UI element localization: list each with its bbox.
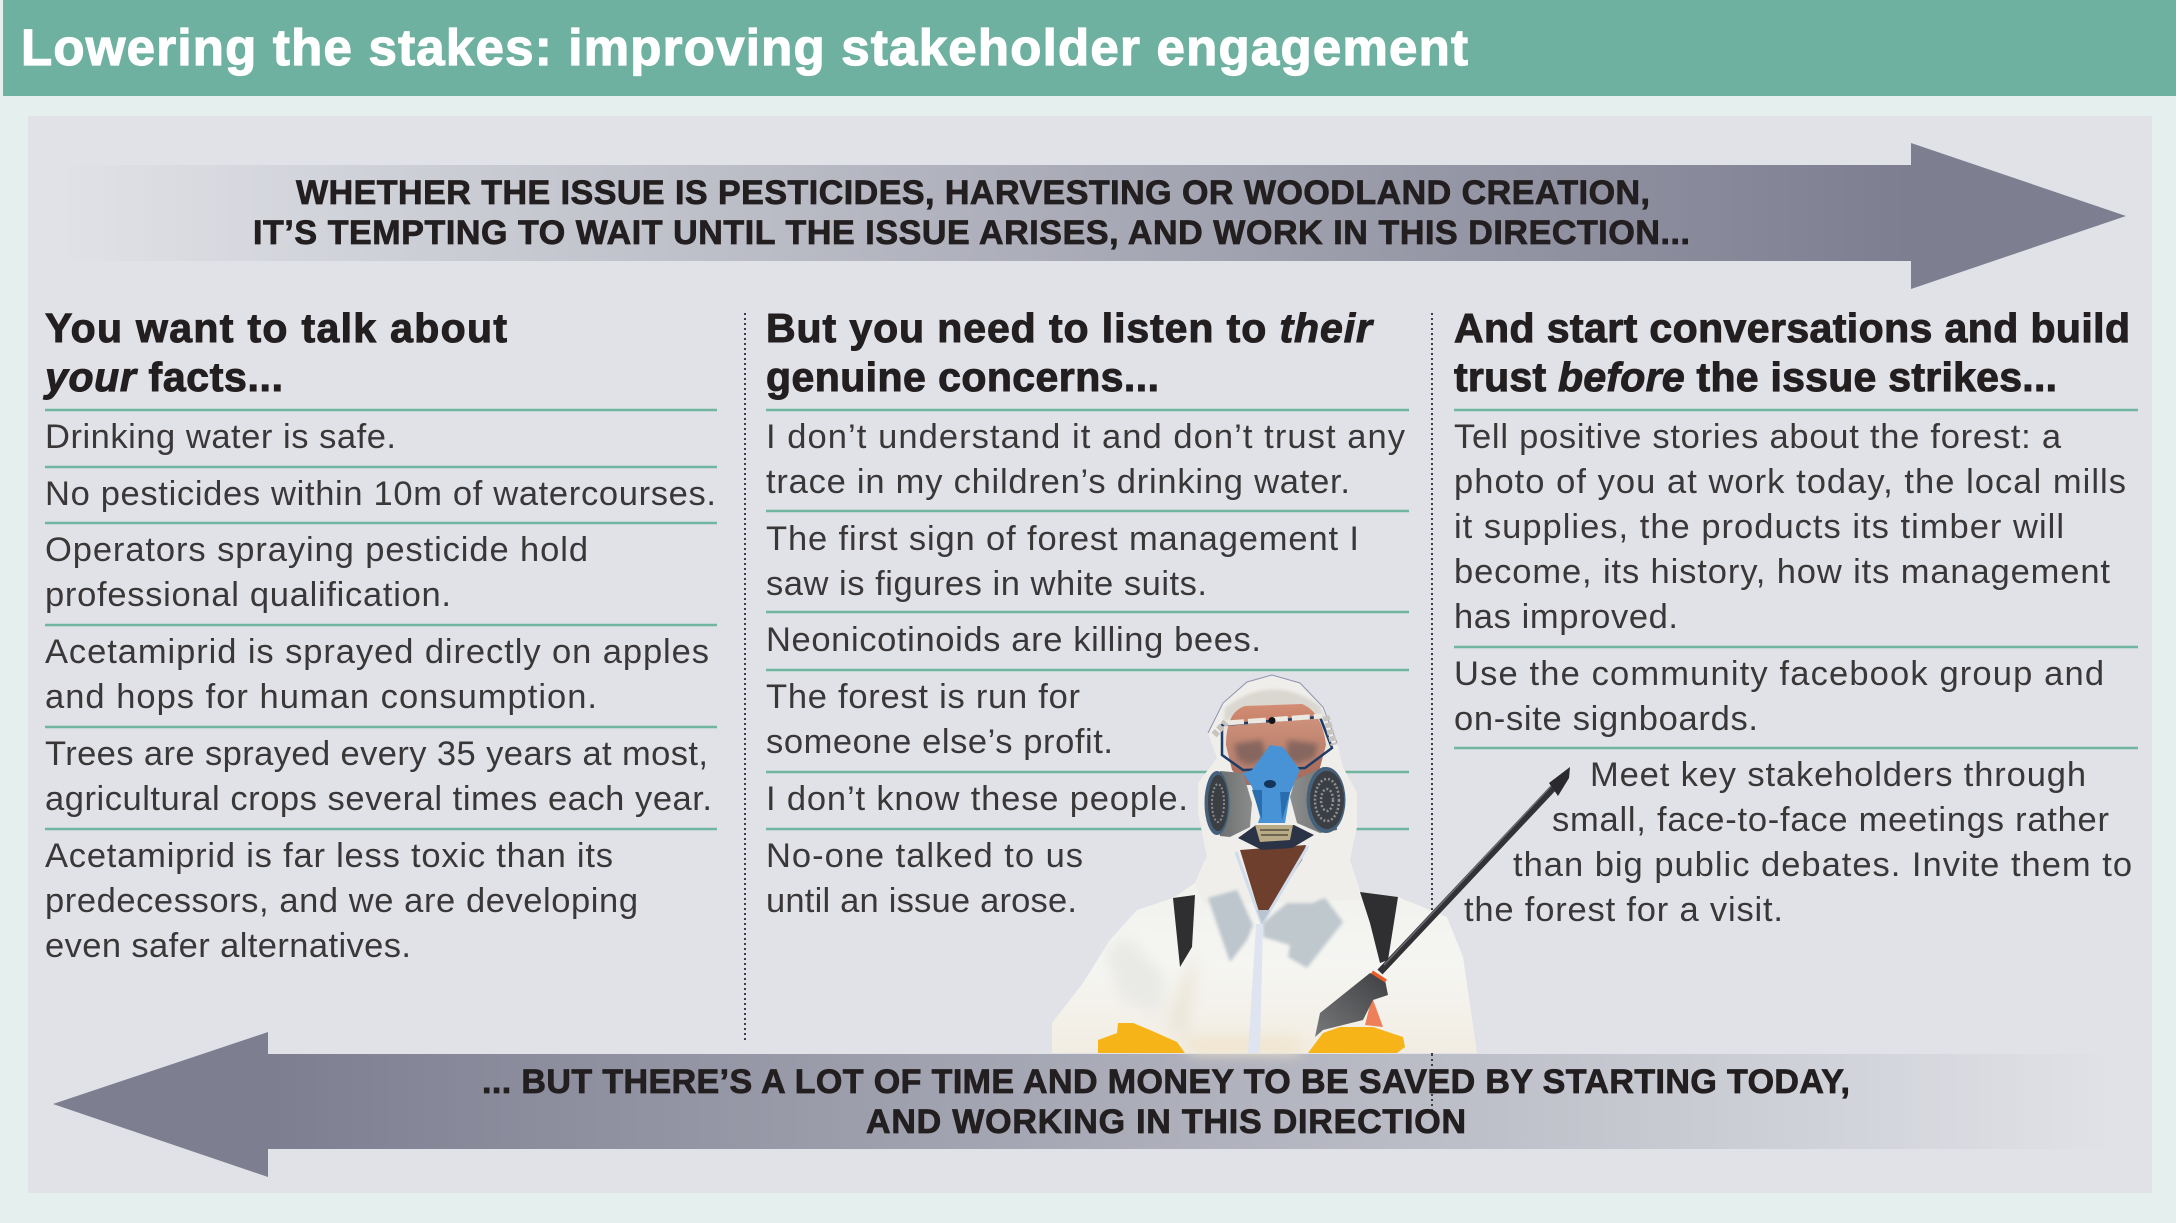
column 2 statements: No-one talked to us: [766, 837, 1083, 875]
column 2 heading: But you need to listen to their: [766, 305, 1374, 351]
column 2 statements: I don’t understand it and don’t trust any: [766, 418, 1406, 456]
column 3 statements: Meet key stakeholders through: [1590, 756, 2086, 794]
column 1 statements: Acetamiprid is far less toxic than its: [45, 837, 613, 875]
column 3 statements: photo of you at work today, the local mills: [1454, 463, 2126, 501]
column 1 statements: and hops for human consumption.: [45, 678, 597, 716]
column 2: their concerns: [766, 305, 1409, 920]
column 1 heading: your facts...: [43, 354, 283, 400]
column 1 statements: predecessors, and we are developing: [45, 882, 638, 920]
column 1: your facts: [43, 305, 717, 965]
column 1 statements: professional qualification.: [45, 576, 451, 614]
column 1 heading: [43, 305, 507, 400]
grey lance handle: [1315, 973, 1388, 1037]
yellow glove right: [1308, 1027, 1405, 1053]
suit soft shading: [1105, 935, 1300, 1053]
hood top outline: [1208, 675, 1337, 743]
column 3 statements: Tell positive stories about the forest: a: [1454, 418, 2062, 456]
column 3 statements: on-site signboards.: [1454, 700, 1758, 738]
T-shirt under suit: [1257, 910, 1270, 923]
spray lance: [1315, 767, 1570, 1037]
right respirator cartridge: [1290, 767, 1346, 833]
collar edges: [1236, 846, 1308, 924]
figure: forestry worker in protective suit and respirator: [1052, 675, 1570, 1053]
column 2 heading: [766, 305, 1374, 400]
column 3 statements: it supplies, the products its timber will: [1454, 508, 2064, 546]
harness strap right: [1360, 892, 1398, 963]
column 3 heading: And start conversations and build: [1454, 305, 2130, 351]
column 1 statements: Trees are sprayed every 35 years at most,: [45, 735, 708, 773]
forehead and face: [1226, 704, 1326, 785]
white protective suit body: [1052, 860, 1477, 1053]
column dividers: [745, 313, 1432, 1110]
column 2 statements: The first sign of forest management I: [766, 520, 1359, 558]
column 1 statements: even safer alternatives.: [45, 927, 411, 965]
column 1 statements: agricultural crops several times each year.: [45, 780, 712, 818]
hood shading: [1224, 689, 1325, 722]
lower mask straps and beard: [1238, 825, 1314, 850]
top arrow text: [253, 174, 1690, 252]
column 3 statements: the forest for a visit.: [1464, 891, 1783, 929]
column 3 statements: [1454, 418, 2132, 929]
column 2 rules: [766, 410, 1409, 829]
bottom arrow text: [482, 1063, 1850, 1141]
column 3 heading: [1454, 305, 2130, 400]
column 2 statements: I don’t know these people.: [766, 780, 1188, 818]
column 2 heading: genuine concerns...: [766, 354, 1159, 400]
column 1 rules: [45, 410, 717, 829]
bottom arrow text: AND WORKING IN THIS DIRECTION: [866, 1103, 1466, 1141]
hood: [1195, 675, 1360, 905]
column 2 statements: [766, 418, 1406, 920]
column 2 statements: someone else’s profit.: [766, 723, 1113, 761]
goggles: [1214, 716, 1334, 770]
divider continuation over arrow: [1431, 1054, 1433, 1110]
yellow glove left: [1098, 1023, 1185, 1053]
neck: [1240, 845, 1306, 922]
column 3 statements: Use the community facebook group and: [1454, 655, 2104, 693]
column 1 statements: Acetamiprid is sprayed directly on apples: [45, 633, 709, 671]
column 2 statements: Neonicotinoids are killing bees.: [766, 621, 1261, 659]
column 2 statements: until an issue arose.: [766, 882, 1077, 920]
bottom arrow text: ... BUT THERE’S A LOT OF TIME AND MONEY TO BE SAVED BY STARTING TODAY,: [482, 1063, 1850, 1101]
top arrow text: WHETHER THE ISSUE IS PESTICIDES, HARVESTING OR WOODLAND CREATION,: [296, 174, 1650, 212]
harness strap left: [1173, 895, 1195, 967]
top arrow pointing right: [55, 143, 2126, 289]
top arrow text: IT’S TEMPTING TO WAIT UNTIL THE ISSUE ARISES, AND WORK IN THIS DIRECTION...: [253, 214, 1690, 252]
orange trigger: [1365, 997, 1383, 1027]
column 3 statements: become, its history, how its management: [1454, 553, 2110, 591]
column 3 statements: than big public debates. Invite them to: [1513, 846, 2132, 884]
column 2 statements: The forest is run for: [766, 678, 1080, 716]
column 3 statements: small, face-to-face meetings rather: [1552, 801, 2109, 839]
blue respirator facepiece: [1243, 745, 1300, 823]
column 2 statements: saw is figures in white suits.: [766, 565, 1207, 603]
column 1 statements: Drinking water is safe.: [45, 418, 396, 456]
eye area shadow: [1234, 740, 1318, 765]
column 3: start conversations: [1454, 305, 2138, 929]
title banner: Lowering the stakes: improving stakeholder engagement: [21, 19, 1468, 76]
left respirator cartridge: [1204, 771, 1252, 837]
column 3 statements: has improved.: [1454, 598, 1678, 636]
bottom arrow pointing left: [53, 1032, 2115, 1177]
exhalation valve: [1255, 825, 1293, 842]
column 3 rules: [1454, 410, 2138, 748]
column 1 statements: Operators spraying pesticide hold: [45, 531, 588, 569]
column 1 statements: [45, 418, 716, 965]
column 2 statements: trace in my children’s drinking water.: [766, 463, 1350, 501]
suit shadows: [1208, 890, 1343, 968]
column 1 heading: You want to talk about: [45, 305, 507, 351]
title banner: [3, 0, 2176, 96]
column 3 heading: trust before the issue strikes...: [1454, 354, 2057, 400]
suit zipper: [1248, 924, 1263, 1053]
column 1 statements: No pesticides within 10m of watercourses.: [45, 475, 716, 513]
